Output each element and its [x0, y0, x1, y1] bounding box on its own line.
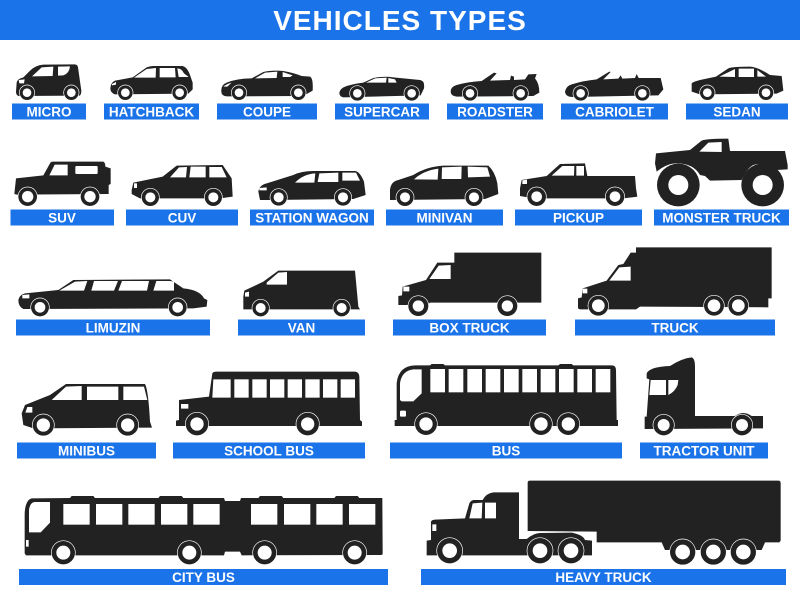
panel: cabriolet	[561, 72, 668, 120]
panel: box truck	[393, 253, 546, 336]
icon: cuv	[132, 165, 233, 207]
icon: limousine	[18, 279, 207, 317]
icon: pickup	[520, 163, 637, 207]
panel: coupe	[217, 71, 317, 120]
label: box truck: BOX TRUCK	[429, 320, 510, 336]
label: hatchback: HATCHBACK	[109, 104, 194, 120]
icon: school bus	[176, 372, 362, 436]
icon: box truck	[398, 253, 541, 317]
icon: bus	[395, 364, 618, 436]
panel: monster truck	[654, 139, 789, 226]
icon: coupe car	[221, 71, 313, 101]
icon: monster truck	[655, 139, 788, 206]
panel: van	[238, 271, 365, 336]
icon: minivan	[390, 166, 498, 207]
label: van: VAN	[288, 320, 315, 336]
panel: cuv	[126, 165, 238, 226]
panel: roadster	[447, 73, 543, 120]
icon: city bus	[25, 496, 383, 565]
label: station wagon: STATION WAGON	[255, 210, 369, 226]
label: coupe: COUPE	[243, 104, 291, 120]
label: truck: TRUCK	[651, 320, 699, 336]
icon: van	[243, 271, 360, 317]
label: truck	[575, 320, 775, 336]
icon: sedan	[692, 67, 783, 101]
panel: tractor unit	[640, 357, 768, 458]
icon: heavy truck	[427, 481, 781, 565]
label: limuzin	[16, 320, 210, 336]
label: box truck	[393, 320, 546, 336]
label: micro: MICRO	[26, 104, 72, 120]
panel: minibus	[17, 384, 156, 458]
label: minivan: MINIVAN	[416, 210, 472, 226]
panel: sedan	[686, 67, 788, 120]
label: pickup: PICKUP	[553, 210, 604, 226]
panel: heavy truck	[421, 481, 786, 585]
label: minibus: MINIBUS	[58, 444, 115, 458]
label: roadster: ROADSTER	[457, 104, 533, 120]
panel: school bus	[173, 372, 365, 458]
icon: micro car	[16, 64, 81, 101]
panel: minivan	[386, 166, 503, 226]
icon: suv	[14, 162, 111, 207]
label: city bus: CITY BUS	[172, 570, 235, 585]
label: city bus	[19, 569, 388, 585]
panel: city bus	[19, 496, 388, 585]
label: school bus: SCHOOL BUS	[224, 444, 314, 458]
icon: cabriolet	[565, 72, 663, 101]
label: suv: SUV	[48, 210, 76, 226]
panel: truck	[575, 247, 775, 336]
label: sedan: SEDAN	[713, 104, 761, 120]
panel: suv	[10, 162, 114, 226]
icon: tractor unit	[645, 357, 763, 436]
label: tractor unit: TRACTOR UNIT	[654, 444, 755, 458]
label: monster truck: MONSTER TRUCK	[662, 210, 781, 226]
panel: station wagon	[250, 171, 374, 226]
title	[0, 0, 800, 40]
label: school bus	[173, 442, 365, 458]
icon: hatchback car	[110, 66, 193, 101]
panel: micro	[12, 64, 86, 120]
label: limuzin: LIMUZIN	[86, 320, 140, 336]
label: cuv: CUV	[168, 210, 196, 226]
icon: minibus	[22, 384, 152, 436]
icon: station wagon	[258, 171, 366, 206]
title: VEHICLES TYPES	[273, 5, 527, 36]
icon: roadster	[451, 73, 539, 101]
label: cabriolet: CABRIOLET	[575, 104, 655, 120]
label: bus	[390, 442, 622, 458]
icon: supercar	[339, 77, 424, 101]
label: bus: BUS	[492, 444, 520, 458]
panel: bus	[390, 364, 622, 458]
label: supercar: SUPERCAR	[344, 104, 420, 120]
icon: truck	[578, 247, 772, 316]
panel: hatchback	[104, 66, 199, 120]
panel: supercar	[335, 77, 429, 120]
panel: limuzin	[16, 279, 210, 336]
panel: pickup	[515, 163, 642, 226]
label: heavy truck: HEAVY TRUCK	[555, 570, 652, 585]
label: heavy truck	[421, 569, 786, 585]
